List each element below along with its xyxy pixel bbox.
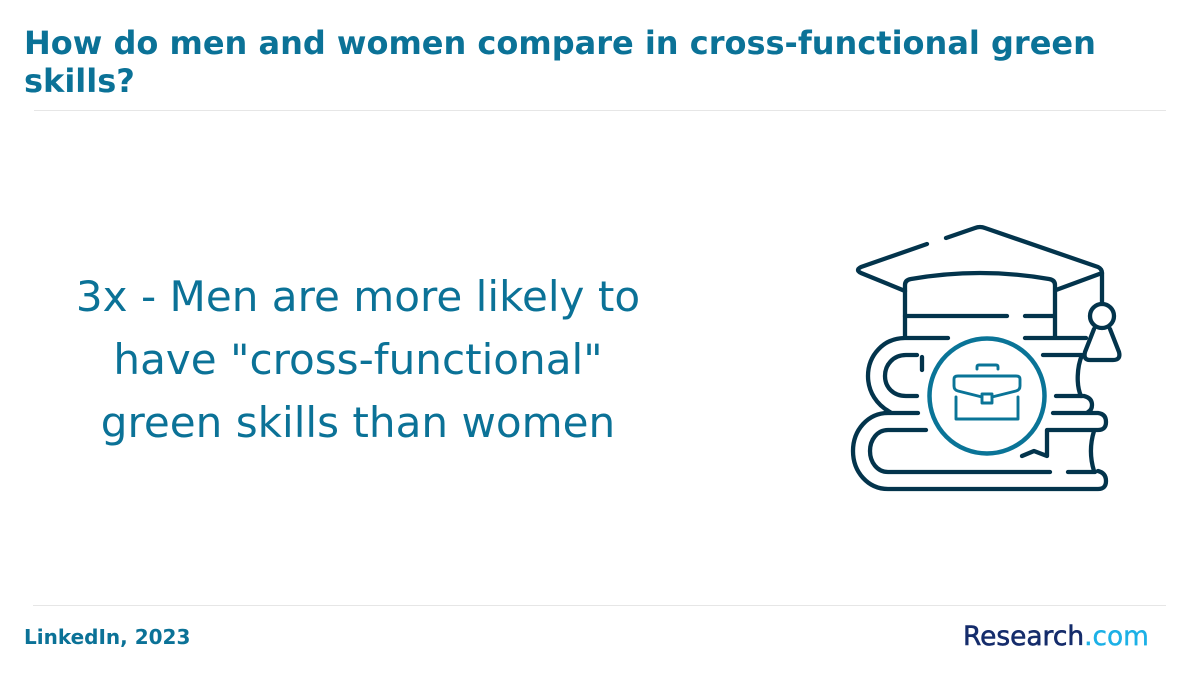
source label: LinkedIn, 2023 <box>24 625 190 649</box>
icon: stack of books <box>853 338 1106 489</box>
icon: briefcase in circle <box>930 338 1044 454</box>
main statement <box>76 272 640 447</box>
main statement: have "cross-functional" <box>113 335 603 384</box>
title: How do men and women compare in cross-functional green skills? <box>24 24 1096 100</box>
icon: graduation cap on books with briefcase <box>850 224 1122 492</box>
icon: graduation cap <box>858 227 1119 360</box>
logo: Research.com: Research.com <box>963 621 1149 652</box>
main statement: 3x - Men are more likely to <box>76 272 640 321</box>
main statement: green skills than women <box>101 398 615 447</box>
